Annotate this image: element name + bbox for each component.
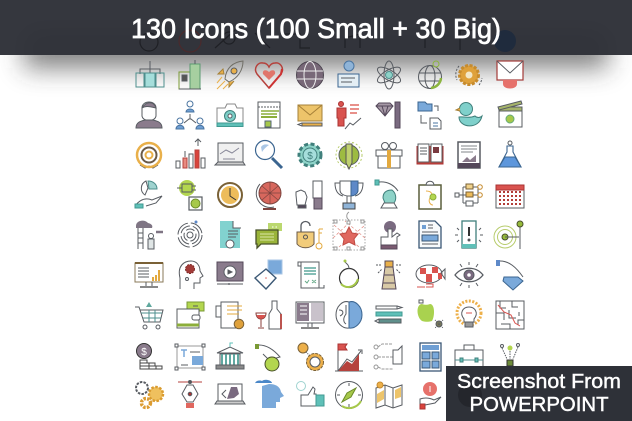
icon: monitor book (296, 302, 324, 328)
icon: phone alert (455, 221, 483, 248)
icon: dollar coins: $ (141, 347, 147, 358)
icon: laptop code (215, 384, 245, 404)
title bar (0, 0, 632, 55)
icon: gold target (137, 143, 161, 168)
icon: person (136, 102, 162, 128)
icon: chess knight hand (375, 180, 398, 208)
icon: hand money (255, 344, 280, 371)
icon: envelope red (497, 61, 523, 88)
icon: teal dollar gear (299, 144, 321, 166)
icon: raised hands (296, 181, 322, 209)
title text: 130 Icons (100 Small + 30 Big) (131, 13, 501, 44)
icon: star network (333, 212, 365, 250)
faint icon behind callout (458, 383, 482, 407)
icon: wallet (177, 302, 204, 328)
icon: printer coin (216, 302, 244, 329)
icon: diamond with bar (376, 102, 400, 128)
icon: thumbs up (296, 382, 324, 406)
icon: teal bird (456, 102, 482, 126)
icon: gold gear (456, 66, 482, 85)
icon: plug socket (177, 180, 202, 210)
icon: hierarchy (136, 61, 164, 87)
icon: red person and chart (337, 102, 361, 129)
icon: cloud ladder person (136, 221, 163, 249)
icon: square maze (496, 301, 524, 329)
icon: flag chart (335, 344, 363, 371)
icon: hand diamond (496, 260, 523, 290)
icon: hand pie (135, 181, 162, 208)
icon: pencil green circle (336, 142, 362, 169)
icon: buildings (179, 60, 201, 89)
icon: video player (217, 262, 243, 285)
icon: shopping cart (135, 302, 163, 329)
icon: calculator (420, 343, 441, 371)
icon: red globe (256, 182, 281, 209)
icon: folders (418, 102, 441, 129)
icon: map (376, 382, 402, 408)
icon: gift (376, 142, 402, 168)
icon: lighthouse (376, 261, 402, 289)
icon: people gear (298, 343, 324, 370)
icon: zeppelin (416, 265, 445, 287)
icon: rocket (217, 61, 243, 89)
icon: calendar (496, 185, 524, 208)
icon: atom (375, 61, 403, 89)
icon: id card (338, 61, 359, 87)
icon: radar target (494, 221, 523, 249)
icon: head gear (179, 261, 203, 289)
icon: clock (218, 183, 242, 207)
icon: apple with bug (418, 300, 443, 328)
icon: hand info (420, 382, 441, 409)
icon: org team (176, 101, 204, 129)
icon: camera (217, 104, 243, 126)
icon: dark globe (296, 62, 324, 88)
icon: blue head (255, 380, 284, 408)
icon: briefcase (455, 345, 483, 371)
shadow under title bar (24, 30, 608, 68)
icon: report (458, 142, 480, 168)
icon: hand touch (381, 221, 400, 249)
icon: eye (455, 262, 483, 288)
icon: bar chart (176, 139, 205, 168)
icon: laptop chart (215, 143, 245, 165)
icon: scroll list (298, 262, 324, 288)
faint icons showing through title bar (140, 30, 516, 52)
icon: dollar coins (136, 344, 162, 369)
icon: bank (216, 343, 244, 369)
icon: teal dollar gear: $ (307, 151, 313, 162)
icon: monitor chart (135, 263, 163, 287)
icon: plant bulb (500, 344, 520, 366)
icon: nodes document (374, 344, 402, 369)
icon: padlock and key (297, 222, 323, 249)
callout: screenshot from powerpoint (446, 366, 632, 421)
icon: trophy (335, 181, 363, 209)
icon: circular maze (178, 220, 202, 247)
icon: magnifier (256, 140, 282, 168)
icon: globe with pin (418, 61, 442, 88)
icon: compass (336, 382, 362, 408)
icon: text box (175, 344, 205, 370)
icon: lightbulb (457, 301, 481, 327)
callout line 2: POWERPOINT (470, 393, 609, 416)
icon: chat bubbles (256, 223, 282, 248)
icon: red book (417, 144, 443, 164)
icon: teal document (220, 221, 241, 248)
icon: flask (499, 141, 521, 167)
icon: bomb (340, 260, 358, 288)
icon: heart (256, 63, 282, 88)
icon: wine and bottle (256, 301, 281, 329)
icon: blue diamonds (255, 260, 282, 289)
icon: flowchart (455, 184, 482, 206)
icon: newspaper (419, 221, 441, 248)
icon: clipboard (419, 181, 441, 209)
icon: clapperboard (498, 101, 522, 127)
icon: document green (258, 102, 280, 128)
icon: pen nib (178, 380, 202, 408)
icon grid (135, 60, 524, 409)
icon: brain (336, 302, 362, 328)
icon: pens (375, 306, 402, 323)
icon: envelope with pencil (298, 105, 322, 126)
callout line 1: Screenshot From (457, 370, 621, 393)
icon: gold gears (136, 382, 163, 408)
